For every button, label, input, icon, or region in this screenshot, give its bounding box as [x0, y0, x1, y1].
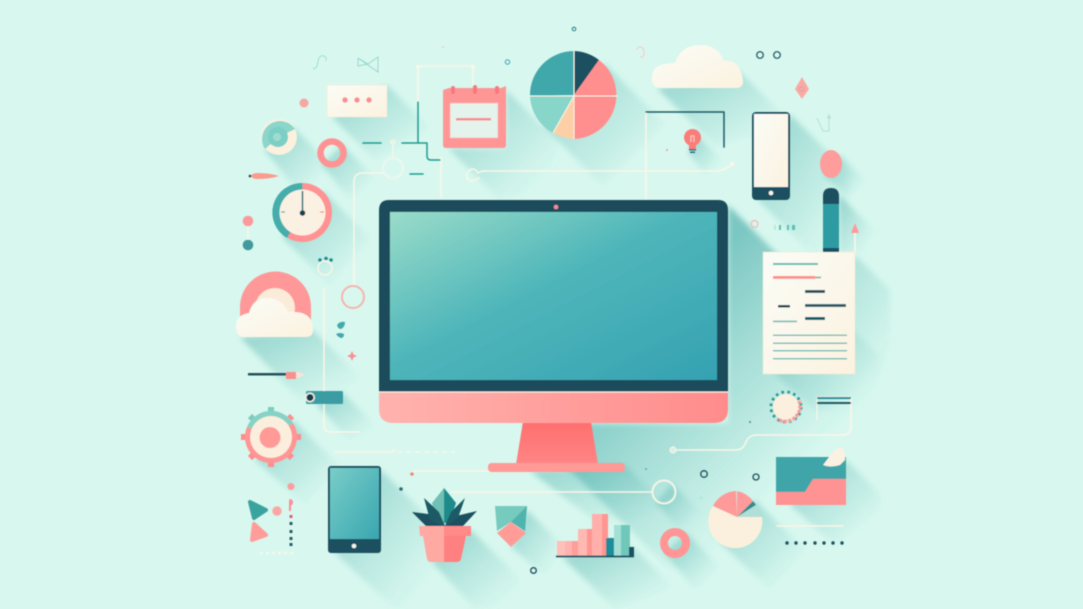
small ring connector	[383, 158, 403, 178]
small pen	[248, 372, 305, 379]
coral oval	[820, 150, 842, 178]
shield icon	[495, 506, 527, 547]
large ring connector	[652, 480, 676, 504]
monitor chin	[379, 392, 728, 423]
ring large left	[342, 286, 364, 308]
squiggle icon	[313, 56, 326, 69]
monitor bezel	[379, 200, 728, 392]
small rings	[505, 27, 780, 573]
cloud top right	[652, 45, 743, 88]
spiky dial	[771, 392, 801, 422]
arrow up	[851, 223, 859, 233]
coral ring upper	[320, 142, 344, 164]
chat bubble	[327, 85, 387, 117]
pin connector left	[243, 216, 253, 250]
window icon	[817, 397, 851, 420]
diamond tag	[795, 77, 809, 99]
document	[763, 252, 855, 374]
monitor screen	[390, 212, 717, 380]
pie chart bottom	[708, 491, 762, 548]
small node	[390, 140, 396, 144]
settings dial	[261, 119, 297, 155]
toggle pill	[305, 391, 343, 404]
small ring connector right	[670, 447, 676, 453]
calendar	[443, 85, 506, 148]
kite shapes left	[250, 483, 295, 553]
bow icon	[358, 57, 378, 72]
small coral dot	[300, 98, 308, 108]
cog	[241, 407, 301, 467]
cloud with rainbow	[236, 272, 313, 337]
smartphone	[752, 112, 790, 200]
potted plant	[412, 488, 477, 562]
stylus	[823, 188, 839, 252]
long shadows	[240, 64, 890, 609]
tablet	[328, 466, 381, 553]
dots row	[785, 541, 844, 545]
faint branch arrow	[817, 114, 830, 131]
connector lines	[324, 66, 855, 526]
node dots	[416, 65, 734, 166]
tiny accents	[399, 46, 751, 499]
monitor	[379, 200, 728, 472]
bar chart	[556, 514, 634, 557]
leaf icons	[336, 322, 345, 338]
monitor stand	[516, 422, 598, 464]
pie chart top	[530, 51, 618, 139]
ring with dots	[318, 257, 333, 275]
wave card	[776, 448, 846, 505]
coral ring lower	[664, 532, 686, 554]
webcam	[554, 205, 558, 209]
sparkle	[347, 351, 357, 361]
monitor base	[488, 463, 625, 472]
small dashes cluster	[774, 225, 795, 230]
clock	[272, 183, 332, 242]
coral pointer	[249, 173, 279, 179]
hook icon	[637, 47, 644, 57]
lightbulb	[684, 129, 701, 153]
